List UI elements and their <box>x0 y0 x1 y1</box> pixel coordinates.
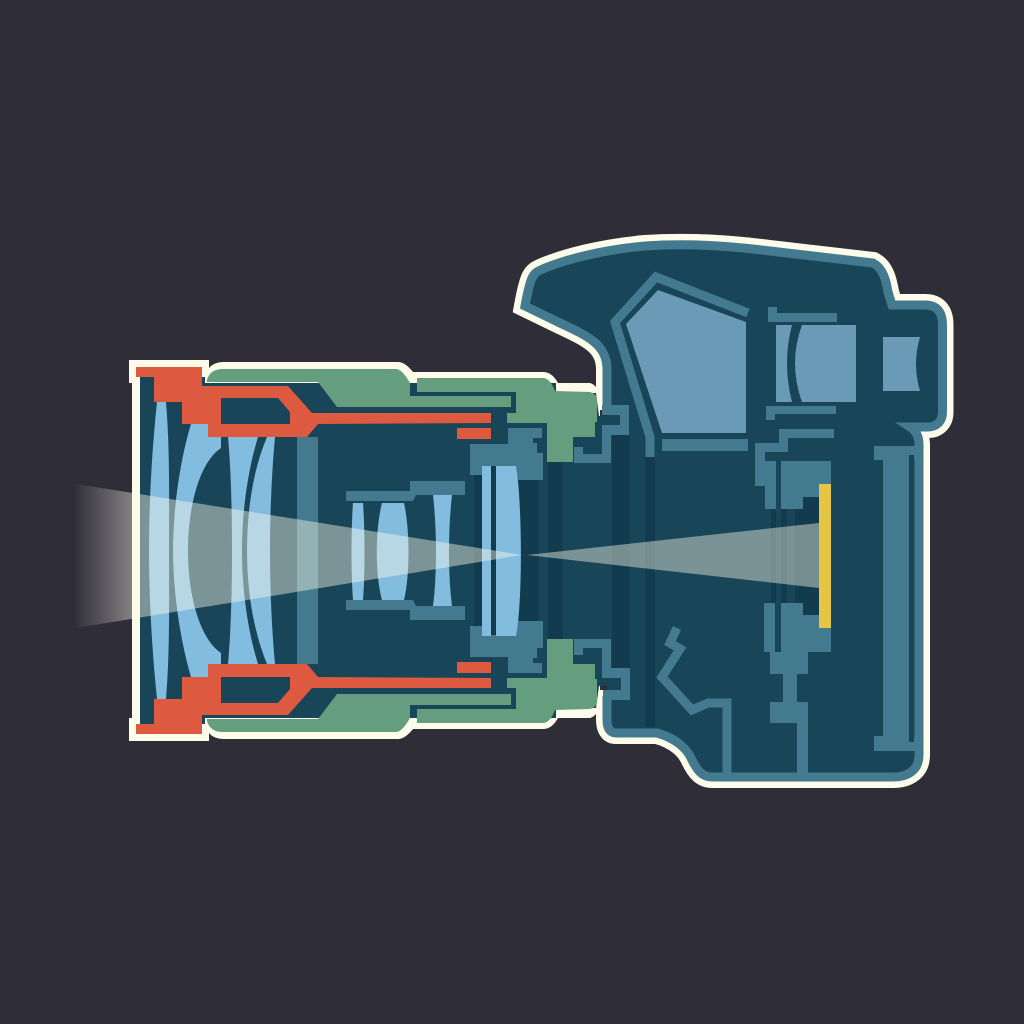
camera body wall <box>525 245 942 777</box>
rear lens mount <box>470 428 543 480</box>
lens outline (cream silhouette) <box>129 360 600 741</box>
eyepiece window <box>883 337 920 391</box>
light beam entering lens <box>76 484 522 628</box>
front element 1 <box>149 402 169 699</box>
pentaprism glass <box>626 290 746 433</box>
eyepiece top holder <box>768 307 837 322</box>
middle element a <box>352 503 364 600</box>
front element 2 <box>173 424 221 677</box>
upper shutter bracket <box>755 429 834 509</box>
camera body outline (cream halo) <box>525 245 942 777</box>
rear flat element <box>482 466 491 636</box>
outer barrel, front section <box>207 369 511 407</box>
viewfinder pentaprism <box>615 277 748 457</box>
strip below prism <box>662 439 748 451</box>
barrel spacer band <box>297 437 318 664</box>
middle element b <box>377 503 408 600</box>
shutter and sensor housing <box>755 429 834 775</box>
lens upper half <box>136 367 597 501</box>
reflex mirror linkage <box>662 628 727 775</box>
pentaprism housing <box>615 277 748 457</box>
lens elements <box>149 402 521 699</box>
eyepiece bottom holder <box>766 406 836 420</box>
right side column <box>874 446 919 751</box>
rear convex element <box>496 466 521 636</box>
front element 3 <box>228 437 258 664</box>
middle element c <box>433 495 452 606</box>
camera body fill <box>525 245 942 777</box>
outer barrel, rear section <box>417 378 597 462</box>
dark internal bands <box>474 435 819 727</box>
light beam to sensor <box>527 523 819 588</box>
image sensor <box>819 484 831 628</box>
red inner barrel <box>136 367 491 437</box>
lens interior <box>140 377 612 724</box>
lens lower half <box>136 600 597 734</box>
red focus ring detail <box>457 428 491 439</box>
lens mount brackets on body <box>574 405 630 700</box>
viewfinder eyepiece optics <box>766 307 920 420</box>
eyepiece lens right <box>795 325 856 402</box>
upper sensor block <box>781 461 831 509</box>
thin gap beside column <box>909 455 914 742</box>
lower sensor assembly <box>764 603 831 775</box>
inner lens holder <box>346 481 465 501</box>
front element 4 <box>247 437 275 664</box>
eyepiece lens left <box>776 325 792 402</box>
